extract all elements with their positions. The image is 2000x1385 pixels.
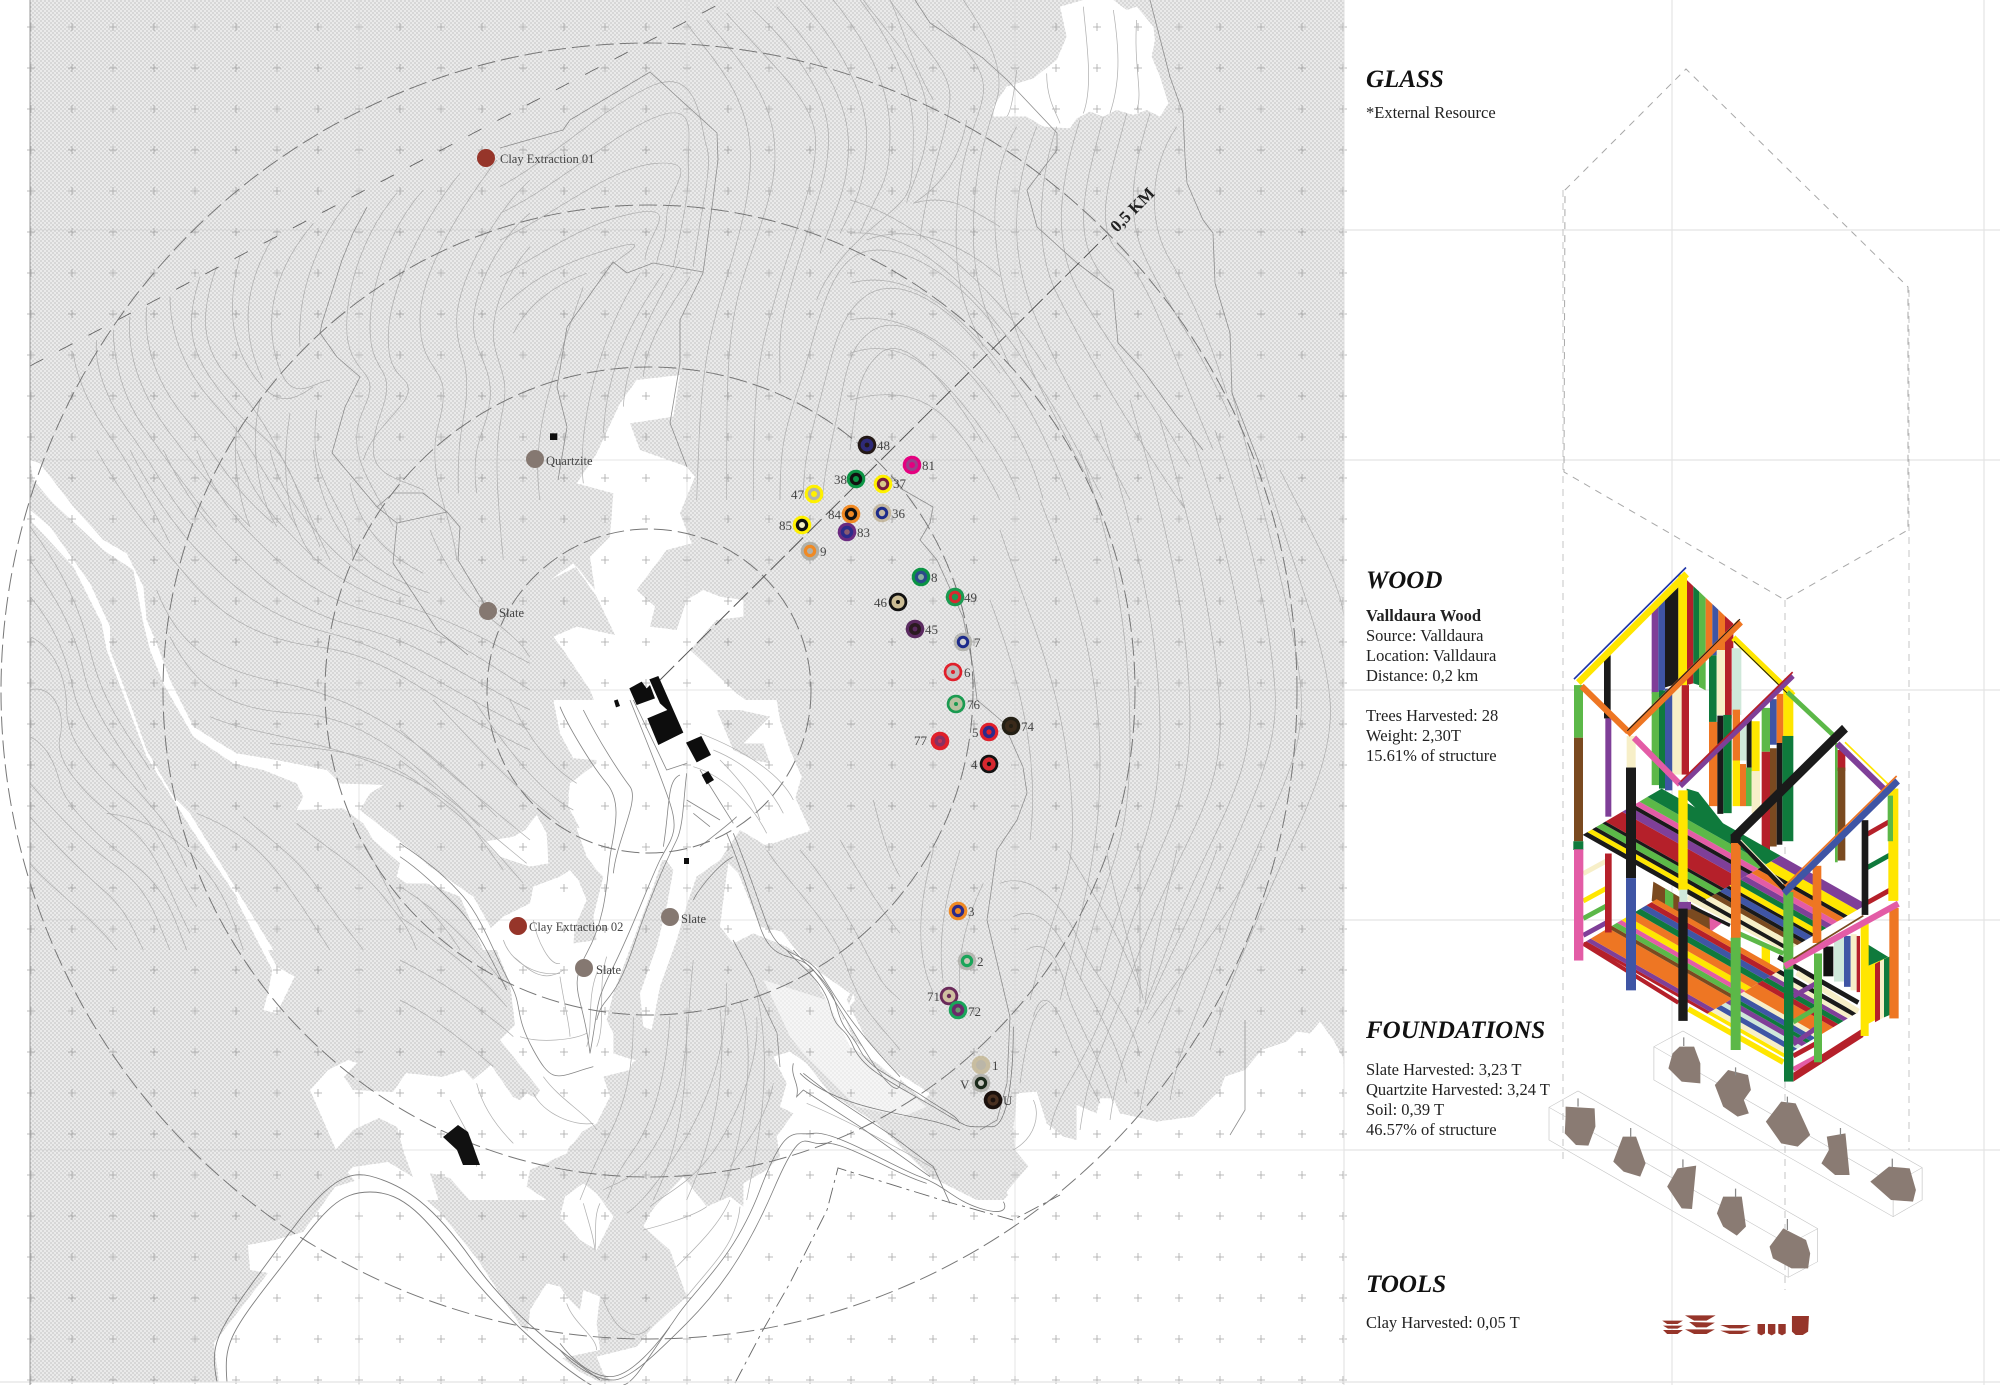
tree 72 <box>949 1001 981 1019</box>
roof and floor beams <box>1574 568 1898 966</box>
heading: foundations: FOUNDATIONS <box>1365 1017 1545 1044</box>
building: southern block <box>443 1125 480 1165</box>
tree 2: 2 <box>977 954 984 969</box>
roads: lower hairpin <box>560 950 1013 1385</box>
tree 74 <box>1002 717 1034 735</box>
tree 77 <box>914 732 949 750</box>
tree 8 <box>912 568 938 586</box>
text: foundations details: Quartzite Harvested: 3,24 T <box>1366 1080 1550 1099</box>
tree 71 <box>927 987 958 1005</box>
tree 3: 3 <box>968 904 974 919</box>
clay tools <box>1662 1315 1809 1335</box>
tree 7: 7 <box>974 635 981 650</box>
terrain shading <box>30 0 1344 1382</box>
heading: tools: TOOLS <box>1366 1271 1446 1298</box>
distance label: 0,5 KM: 0,5 KM <box>1106 184 1159 236</box>
diagonal brace <box>1687 789 1732 834</box>
survey crosses <box>25 0 1350 1385</box>
radius line <box>660 235 1107 680</box>
contour lines: north west <box>73 160 530 560</box>
tree 9 <box>801 542 826 560</box>
tree 45 <box>906 620 938 638</box>
text: wood details: Valldaura Wood <box>1366 606 1481 625</box>
tree 45: 45 <box>925 622 938 637</box>
contour lines: east <box>990 393 1344 1130</box>
tree 84 <box>828 505 860 523</box>
contour lines: lower block <box>567 960 1036 1350</box>
site: clay extraction 01: Clay Extraction 01 <box>500 152 594 166</box>
radius rings <box>1 43 1297 1339</box>
tree U <box>984 1091 1013 1109</box>
farm buildings <box>550 433 714 784</box>
text: foundations details <box>1366 1060 1550 1139</box>
text: wood details: Location: Valldaura <box>1366 646 1497 665</box>
tree 81 <box>903 456 935 474</box>
rear posts <box>1604 655 1869 1062</box>
text: foundations details: 46.57% of structure <box>1366 1120 1497 1139</box>
contour lines: south east fan <box>921 850 1260 1103</box>
axonometric timber structure <box>1573 568 1899 1082</box>
map panel: terrain <box>1 0 1350 1385</box>
text: wood details <box>1366 606 1498 765</box>
contour lines: west <box>30 450 530 950</box>
tree 85: 85 <box>779 518 792 533</box>
tree V: V <box>960 1077 970 1092</box>
tree 48 <box>858 436 890 454</box>
boundary line <box>30 0 727 366</box>
tree 85 <box>779 516 811 534</box>
site: clay extraction 01 <box>477 149 594 167</box>
tree 6 <box>944 663 971 681</box>
text: wood details: 15.61% of structure <box>1366 746 1497 765</box>
site: slate centre <box>661 908 706 926</box>
site: slate south: Slate <box>596 963 621 977</box>
stones: front row <box>1565 1107 1810 1268</box>
tree 6: 6 <box>964 665 971 680</box>
forest patch by southern block <box>330 1118 413 1190</box>
tree V <box>960 1074 990 1092</box>
text: wood details: Weight: 2,30T <box>1366 726 1461 745</box>
front posts <box>1573 685 1899 1082</box>
map frame line <box>29 0 31 1385</box>
site: clay extraction 02: Clay Extraction 02 <box>529 920 623 934</box>
text: foundations details: Slate Harvested: 3,23 T <box>1366 1060 1522 1079</box>
road strip south east <box>787 950 930 1100</box>
tree 81: 81 <box>922 458 935 473</box>
tree U: U <box>1003 1093 1013 1108</box>
foundation cage: front row <box>1549 1091 1818 1277</box>
tree 37 <box>874 475 906 493</box>
cleared land: central ridge <box>550 375 810 860</box>
foundation cage: rear row <box>1654 1031 1922 1217</box>
tree 47: 47 <box>791 487 804 502</box>
site: slate west <box>479 602 524 620</box>
tree 38 <box>834 470 865 488</box>
hairpin west road <box>214 1175 600 1385</box>
tree 47 <box>791 485 823 503</box>
speckled clearing <box>763 980 927 1117</box>
glass outline <box>1564 69 1908 600</box>
tree 9: 9 <box>820 544 826 559</box>
upper deck boards <box>1583 789 1867 951</box>
tree 83: 83 <box>857 525 870 540</box>
tree 1 <box>972 1056 998 1074</box>
tree 83 <box>838 523 870 541</box>
contour lines: north centre <box>500 0 1000 500</box>
cleared land: stream west lower <box>30 510 273 950</box>
text: glass note: *External Resource <box>1366 103 1496 122</box>
text: foundations details: Soil: 0,39 T <box>1366 1100 1444 1119</box>
stream continuation <box>237 900 295 1013</box>
text: wood details: Trees Harvested: 28 <box>1366 706 1498 725</box>
building: small hut <box>684 858 689 864</box>
map grid <box>30 0 1344 1385</box>
ladder rungs <box>1583 821 1891 1069</box>
tree 46: 46 <box>874 595 888 610</box>
contour lines: north east <box>850 0 1230 508</box>
tree 8: 8 <box>931 570 938 585</box>
cleared land: south corridor <box>310 700 808 1200</box>
tree 38: 38 <box>834 472 847 487</box>
forest patch over clearing <box>717 710 770 763</box>
text: wood details: Source: Valldaura <box>1366 626 1484 645</box>
tree 5: 5 <box>972 725 978 740</box>
tree 7 <box>954 633 981 651</box>
trails <box>320 0 1262 1135</box>
tree 1: 1 <box>992 1058 998 1073</box>
tree 49 <box>946 588 977 606</box>
tree 4: 4 <box>971 757 978 772</box>
foundation stones <box>1549 1031 1922 1277</box>
cleared land: valley edge <box>487 1057 637 1167</box>
tree 74: 74 <box>1021 719 1034 734</box>
tree 72: 72 <box>968 1004 981 1019</box>
tree 37: 37 <box>893 476 906 491</box>
stones: rear row <box>1668 1047 1916 1202</box>
under-deck joists <box>1687 889 1858 1011</box>
tree 71: 71 <box>927 989 940 1004</box>
cleared land: top clearing <box>993 0 1168 128</box>
anchor pins <box>1578 1037 1892 1230</box>
site: slate centre: Slate <box>681 912 706 926</box>
tree 2 <box>958 952 984 970</box>
text: wood details: Distance: 0,2 km <box>1366 666 1478 685</box>
heading: glass: GLASS <box>1366 66 1444 93</box>
forest strip by road <box>430 1173 500 1260</box>
tree 84: 84 <box>828 507 842 522</box>
tree 36 <box>873 504 906 522</box>
lower front edge <box>1583 944 1783 1062</box>
tree 5 <box>972 723 998 741</box>
tree 46 <box>874 593 907 611</box>
cleared land: east coast <box>1007 1022 1348 1383</box>
back gable walls <box>1652 580 1890 1024</box>
cleared land: lower patches <box>560 1183 613 1250</box>
tree 4 <box>971 755 998 773</box>
cleared land: road strip east <box>720 863 900 1083</box>
site: clay extraction 02 <box>509 917 623 935</box>
heading: wood: WOOD <box>1366 567 1442 594</box>
cleared land: lower plain <box>597 1052 1060 1385</box>
bottom right rail <box>1793 1028 1863 1082</box>
site: quartzite <box>526 450 593 468</box>
site boundary: dash-dot <box>735 1168 1060 1383</box>
cleared land: stream west upper <box>30 460 503 950</box>
guide lines <box>1563 190 1909 1290</box>
tree 3 <box>949 902 974 920</box>
tree 76 <box>947 695 980 713</box>
roads <box>400 700 900 1088</box>
site: slate south <box>575 959 621 977</box>
tree 77: 77 <box>914 733 928 748</box>
cleared land: south patch <box>527 1283 600 1360</box>
text: tools details: Clay Harvested: 0,05 T <box>1366 1313 1520 1332</box>
site: slate west: Slate <box>499 606 524 620</box>
lower deck boards <box>1583 899 1857 1057</box>
tree 76: 76 <box>967 697 980 712</box>
site: quartzite: Quartzite <box>546 454 593 468</box>
tree 36: 36 <box>892 506 906 521</box>
tree 48: 48 <box>877 438 890 453</box>
cleared land: hairpin interior <box>214 1176 600 1382</box>
contour lines: south valley <box>400 700 900 1200</box>
cleared land: wing patch <box>485 815 548 867</box>
tree 49: 49 <box>964 590 977 605</box>
